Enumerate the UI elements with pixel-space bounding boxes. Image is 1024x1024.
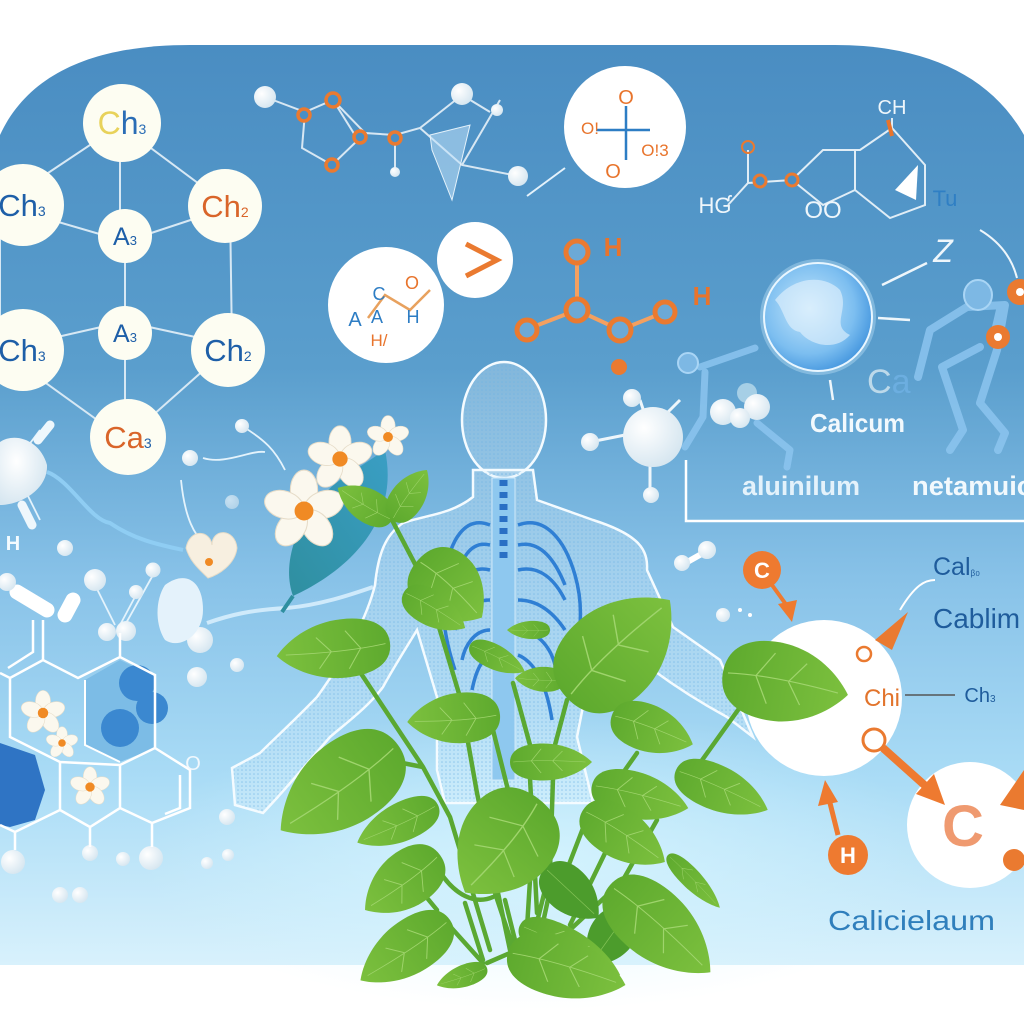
molecule network: hexagon of labelled circles: Ch3	[98, 105, 147, 141]
label: Calbo: Calᵦ₀	[933, 553, 980, 581]
bottom glow	[140, 710, 940, 1010]
central orange OH molecule: H	[693, 281, 711, 311]
floating molecule bits, right	[674, 541, 752, 622]
white circle: molecule O O: O!3	[641, 141, 669, 160]
leaf: back lower	[572, 899, 646, 978]
leaf: right 4	[569, 789, 678, 883]
central orange OH molecule	[517, 232, 711, 375]
molecule network: hexagon of labelled circles: Ch2	[201, 189, 249, 224]
white circle: molecule O O: O	[618, 87, 634, 109]
right ring molecule: HƓ	[698, 193, 732, 218]
caption bracket frame	[686, 460, 1024, 521]
white circle: molecule O O: O	[605, 161, 621, 183]
orange arrows and markers	[743, 551, 945, 875]
white circle: molecule O O	[527, 66, 686, 196]
orange arrows and markers: C	[754, 558, 770, 583]
top molecule with orange rings	[254, 83, 528, 200]
running human figure, right	[918, 279, 1024, 450]
label: Cablim: Cablim	[933, 603, 1020, 634]
white circle: molecule O O: O!	[581, 119, 599, 138]
label: Calicielaum: Calicielaum	[828, 905, 995, 936]
leaf: sprout right	[378, 460, 441, 530]
reaction circle: main	[746, 580, 996, 776]
bubble: small molecule and arrow: O	[405, 273, 419, 293]
molecule network: hexagon of labelled circles: Ch2	[204, 333, 252, 368]
bubble: small molecule and arrow: C	[372, 284, 386, 304]
reaction circle: small	[907, 762, 1024, 888]
leaf: big centre	[428, 770, 577, 923]
hexagon lattice with blue cell, left	[0, 620, 201, 850]
right ring molecule: CH	[878, 97, 906, 119]
blue globe	[760, 259, 927, 400]
flower branch	[186, 416, 411, 612]
leaf: right 3	[667, 749, 777, 831]
leaf: big left	[256, 711, 423, 864]
leaf: lower left	[345, 898, 465, 1003]
small flowers, lattice	[19, 690, 111, 807]
leaf: big right	[534, 565, 703, 733]
human figure	[232, 362, 753, 813]
bubble: small molecule and arrow: H	[406, 307, 420, 327]
leaf: back middle	[530, 851, 614, 934]
right ring molecule: OO	[804, 197, 842, 224]
molecule network: hexagon of labelled circles: Ca3	[104, 420, 152, 455]
hexagon lattice with blue cell, left: O	[185, 753, 201, 775]
plant stems	[360, 520, 743, 963]
bubble: small molecule and arrow	[328, 222, 513, 363]
plant leaves	[256, 460, 855, 1014]
leaf: folded	[395, 577, 474, 643]
leaf: centre flat	[510, 743, 592, 781]
white molecules, left: H	[6, 533, 20, 555]
molecule network: hexagon of labelled circles	[0, 84, 265, 475]
leaf: narrow right	[661, 848, 727, 915]
bubble: small molecule and arrow: A	[371, 307, 383, 327]
reaction circle: small: C	[942, 794, 984, 859]
leaf: bottom small	[433, 957, 491, 996]
leaf: bottom upper	[511, 907, 629, 993]
central orange OH molecule: H	[604, 232, 622, 262]
orange arrows and markers: H	[840, 843, 856, 868]
label: Calcium: Calicum	[810, 408, 905, 438]
leaf: over circle	[716, 633, 855, 734]
leaf: right 1	[604, 693, 701, 767]
leaf: left 3	[348, 832, 457, 933]
reaction circle: main: Ch3	[964, 685, 996, 707]
right ring molecule: Tu	[933, 186, 957, 211]
leaf: upper left	[273, 614, 393, 685]
right ring molecule: Z	[932, 233, 954, 269]
leaf: left 2	[349, 787, 446, 860]
bubble: small molecule and arrow: H/	[370, 331, 388, 350]
right ring molecule	[698, 97, 1017, 278]
leaf: small top	[507, 621, 550, 639]
label: Ca: Ca	[867, 363, 911, 401]
white molecules, left	[0, 419, 373, 903]
bubble: small molecule and arrow: A	[348, 309, 362, 331]
runner and cluster molecule, center right	[581, 348, 790, 503]
reaction circle: main: Chi	[864, 685, 900, 712]
leaf: upper round	[395, 534, 505, 643]
leaf: pair left	[465, 634, 530, 683]
leaf: right 2	[586, 762, 694, 831]
leaf: pair right	[515, 666, 565, 692]
leaf: sprout left	[329, 473, 401, 535]
leaf: lower right	[587, 859, 733, 998]
leaf: middle	[405, 690, 502, 747]
label: aluminium: aluinilum	[742, 471, 860, 501]
molecule network: hexagon of labelled circles: A3	[113, 320, 137, 348]
molecule network: hexagon of labelled circles: A3	[113, 223, 137, 251]
leaf: bottom	[500, 923, 634, 1014]
